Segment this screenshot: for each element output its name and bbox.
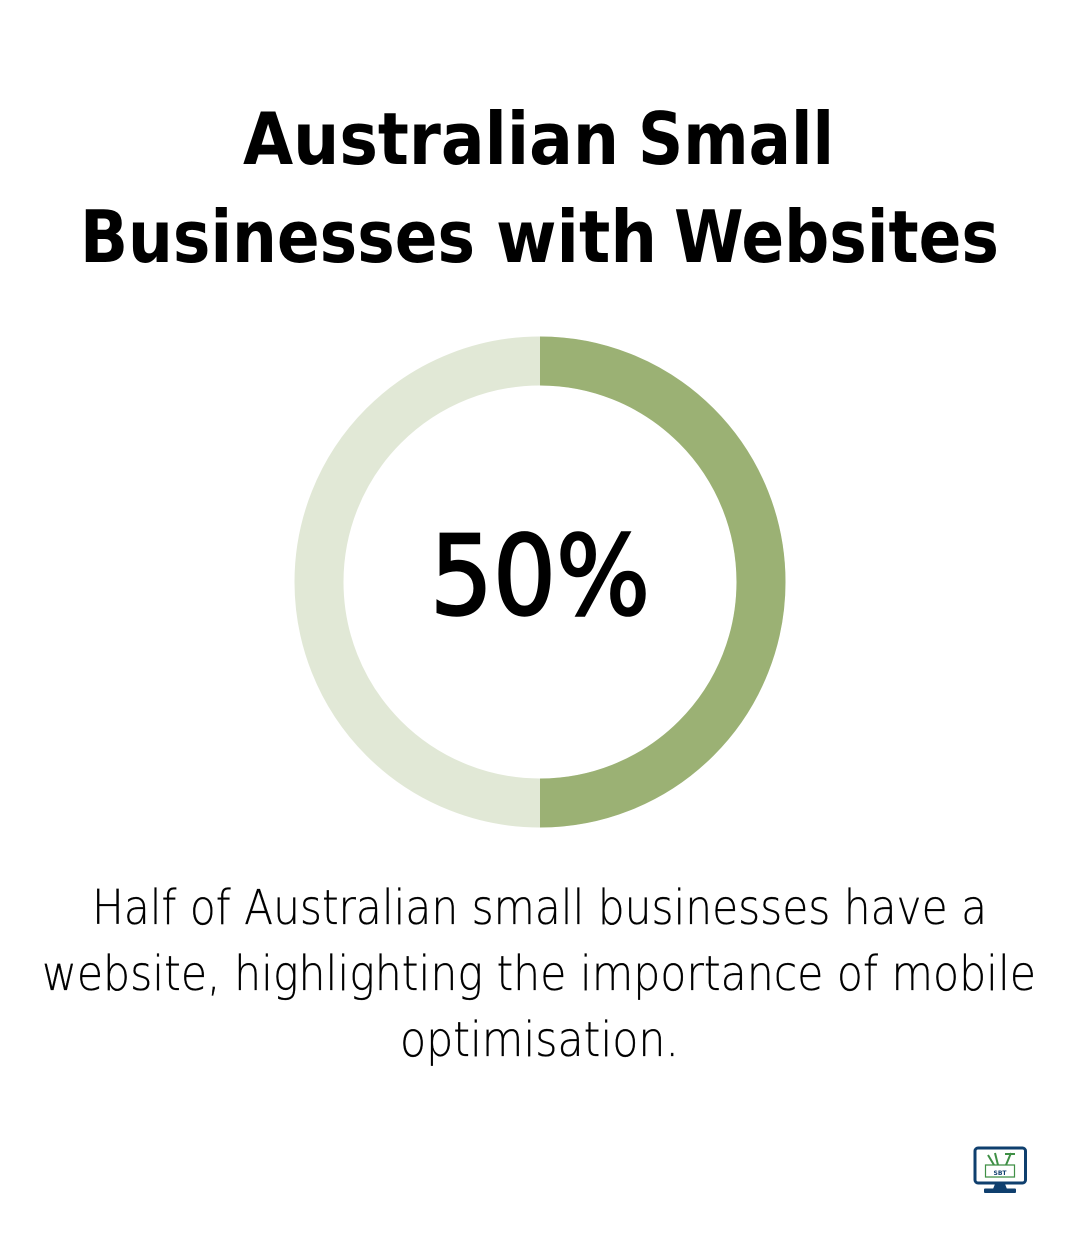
icon: monitor logo with toolbox: SBT [994, 1170, 1007, 1177]
title [80, 97, 999, 279]
description text: optimisation. [400, 1012, 679, 1068]
title: Websites [674, 195, 999, 279]
description text [42, 880, 1036, 1068]
icon: monitor logo with toolbox [975, 1148, 1026, 1193]
donut chart: 50% [319, 361, 761, 803]
title: with [496, 195, 657, 279]
title: Small [638, 97, 834, 181]
description text: Half of Australian small businesses have a [92, 880, 987, 936]
title: Australian [243, 97, 619, 181]
title: Businesses [80, 195, 475, 279]
donut value: 50% [430, 512, 650, 640]
